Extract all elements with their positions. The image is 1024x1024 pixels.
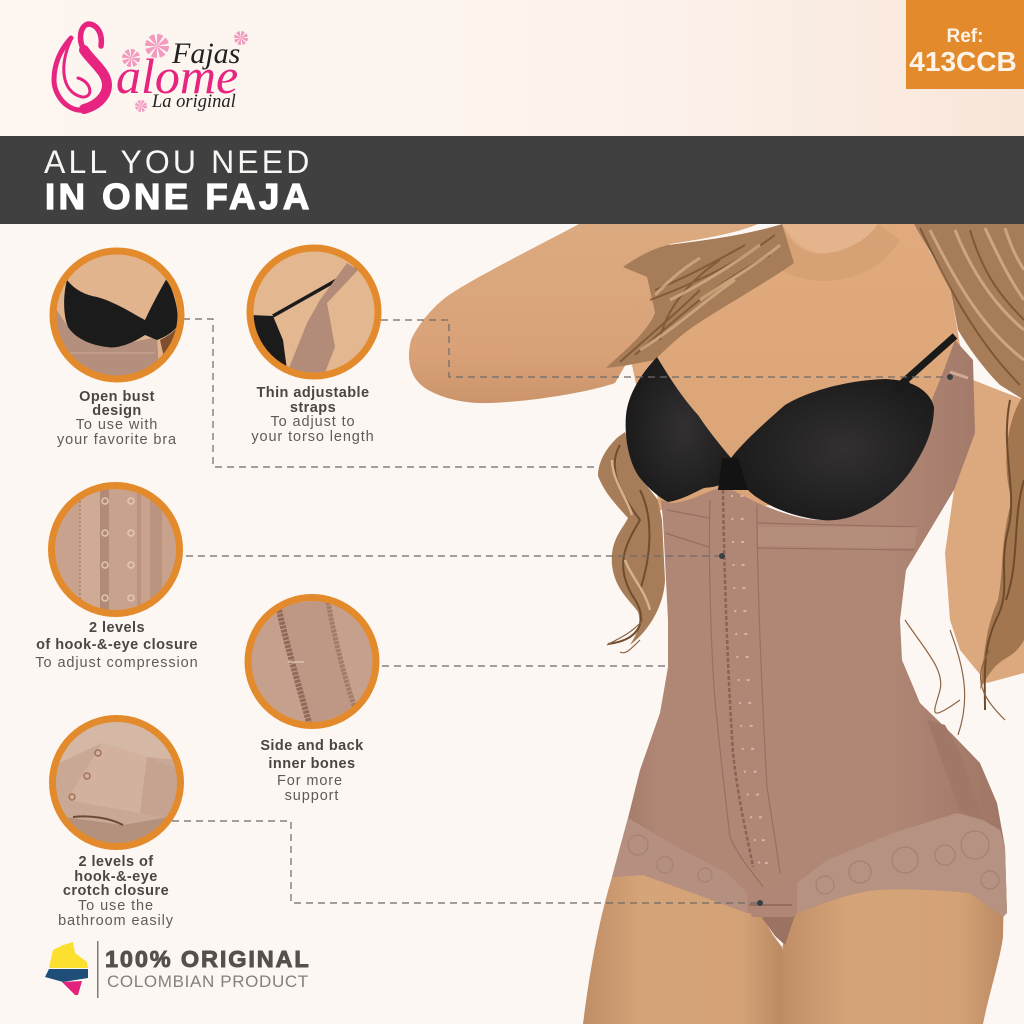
text: hook closure: of hook-&-eye closure xyxy=(36,637,198,653)
circle: hook closure xyxy=(52,485,180,615)
hair right xyxy=(914,224,1024,400)
divider xyxy=(97,941,98,998)
title banner: IN ONE FAJA xyxy=(45,176,313,217)
band seams xyxy=(665,510,918,550)
curls xyxy=(607,620,1005,735)
text: crotch closure: crotch closure xyxy=(63,883,169,899)
flowers xyxy=(126,34,244,109)
bra left cup xyxy=(626,357,731,502)
chest skin xyxy=(632,224,960,510)
title banner: ALL YOU NEED xyxy=(44,144,312,180)
header background xyxy=(0,0,1024,136)
text: straps: To adjust to xyxy=(271,414,355,430)
origin text: COLOMBIAN PRODUCT xyxy=(107,972,309,991)
right leg xyxy=(782,880,1004,1024)
right arm xyxy=(945,380,1024,683)
text: inner bones: Side and back xyxy=(260,738,364,754)
lace left xyxy=(612,818,747,913)
lace right xyxy=(797,813,1007,917)
text: open bust: design xyxy=(92,403,142,419)
logo word: alome: alome xyxy=(116,48,238,104)
logo xyxy=(54,24,244,112)
hook row xyxy=(723,490,753,867)
hair over shoulder xyxy=(606,224,794,368)
text: straps: Thin adjustable xyxy=(256,385,370,401)
origin text: 100% ORIGINAL xyxy=(105,946,311,972)
bra right cup xyxy=(731,379,934,520)
bra center bow xyxy=(718,458,748,490)
bra strap xyxy=(900,336,955,385)
chin xyxy=(782,224,878,253)
text: open bust xyxy=(57,389,177,448)
text: inner bones xyxy=(260,738,364,804)
text: crotch closure xyxy=(58,854,174,929)
hair left xyxy=(598,432,665,645)
logo word: La original: La original xyxy=(151,92,236,112)
icon: Colombia map flag xyxy=(45,942,88,995)
circle: straps xyxy=(250,248,378,378)
model photo xyxy=(409,224,1024,1024)
crotch tab xyxy=(747,893,793,917)
hair strands shoulder xyxy=(620,235,775,362)
text: open bust: your favorite bra xyxy=(57,432,177,448)
text: straps: your torso length xyxy=(251,429,375,445)
strap hook xyxy=(895,380,907,392)
swan mark xyxy=(54,24,107,110)
reference badge: Ref: xyxy=(947,26,983,47)
gusset xyxy=(760,915,795,945)
lighter band xyxy=(758,527,918,548)
logo word: Fajas: Fajas xyxy=(171,37,240,70)
text: inner bones: support xyxy=(285,788,339,804)
circle: crotch closure xyxy=(50,718,180,850)
text: crotch closure: bathroom easily xyxy=(58,913,174,929)
text: inner bones: For more xyxy=(277,773,343,789)
text: hook closure xyxy=(35,620,199,671)
text: straps xyxy=(251,385,375,445)
left leg xyxy=(583,868,782,1024)
origin text xyxy=(105,946,311,991)
reference badge: 413CCB xyxy=(909,46,1017,77)
hair right edge xyxy=(980,395,1024,690)
text: hook closure: To adjust compression xyxy=(35,655,199,671)
text: open bust: To use with xyxy=(76,417,158,433)
title banner xyxy=(0,136,1024,224)
hair left strands xyxy=(608,445,649,644)
text: crotch closure: hook-&-eye xyxy=(74,869,158,885)
text: inner bones: inner bones xyxy=(268,756,356,772)
chin shadow xyxy=(770,224,900,281)
strap slider xyxy=(950,372,968,378)
connector lines xyxy=(172,319,953,906)
circle: open bust xyxy=(50,251,181,385)
eye rows xyxy=(742,495,767,867)
text: crotch closure: To use the xyxy=(78,898,154,914)
lace pattern xyxy=(628,831,999,894)
reference badge xyxy=(906,0,1024,89)
text: hook closure: 2 levels xyxy=(89,620,145,636)
text: crotch closure: 2 levels of xyxy=(78,854,154,870)
text: straps: straps xyxy=(290,400,336,416)
raised arm xyxy=(409,224,758,403)
side panel xyxy=(927,720,983,820)
shapewear body xyxy=(612,340,1007,917)
hair right strands xyxy=(930,228,1024,360)
circle: inner bones xyxy=(248,595,376,726)
text: open bust: Open bust xyxy=(79,389,155,405)
placket seams xyxy=(709,500,780,887)
